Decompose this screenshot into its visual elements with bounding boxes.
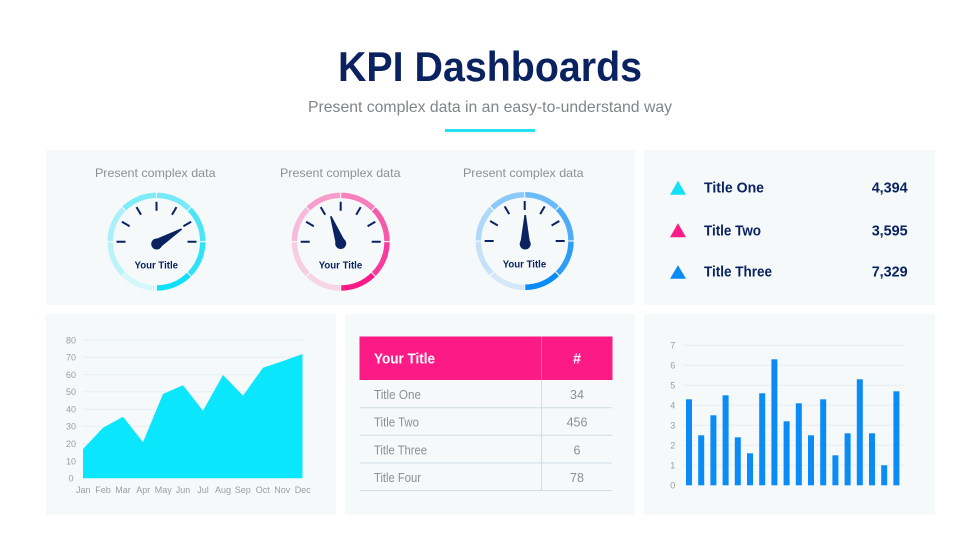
legend row: Title Three [670, 264, 908, 281]
gauge: blue: Present complex data [463, 166, 584, 180]
table rows: 78 [570, 471, 584, 485]
bar chart gridlines and y axis: 1 [670, 460, 675, 470]
bar chart gridlines and y axis: 7 [670, 340, 675, 350]
gauge: pink: Present complex data [280, 166, 401, 180]
bar chart gridlines and y axis: 4 [670, 400, 675, 410]
table rows: Title Two [374, 416, 419, 430]
area chart gridlines and y axis: 0 [68, 474, 74, 484]
table rules [360, 380, 612, 490]
panel: area chart [46, 314, 336, 515]
area chart gridlines and y axis: 80 [66, 335, 76, 345]
gauge: blue: Your Title [503, 258, 546, 270]
bar chart gridlines and y axis [670, 340, 904, 490]
bars [686, 359, 899, 485]
title: KPI Dashboards [338, 43, 642, 90]
month labels: Apr [136, 485, 150, 495]
month labels: Jul [197, 485, 209, 495]
table rows: Title Four [374, 471, 421, 485]
area chart gridlines and y axis: 30 [66, 422, 76, 432]
area chart gridlines and y axis: 60 [66, 370, 76, 380]
area chart gridlines and y axis: 10 [66, 456, 76, 466]
table rows: Title Three [374, 444, 427, 458]
month labels [76, 485, 311, 495]
panel: bar chart [644, 314, 935, 515]
legend row: Title Two: Title Two [704, 222, 761, 239]
table header [360, 336, 612, 380]
area series [83, 354, 302, 478]
panel: legend with KPI values [644, 150, 935, 305]
gauge: cyan [91, 166, 222, 307]
month labels: Mar [115, 485, 131, 495]
area chart gridlines and y axis: 40 [66, 404, 76, 414]
area chart gridlines and y axis: 70 [66, 353, 76, 363]
legend row: Title Two: 3,595 [872, 222, 908, 239]
panel: table [345, 314, 635, 515]
month labels: Jun [176, 485, 190, 495]
legend row: Title Three: Title Three [704, 264, 772, 281]
area chart gridlines and y axis: 20 [66, 439, 76, 449]
month labels: Oct [256, 485, 270, 495]
table rows: 456 [567, 416, 587, 430]
table rows: 6 [574, 444, 581, 458]
title underline accent [445, 129, 535, 132]
area chart gridlines and y axis [66, 335, 303, 484]
month labels: Jan [76, 485, 91, 495]
gauge: cyan: Present complex data [95, 166, 216, 180]
month labels: Sep [235, 485, 251, 495]
table header: # [573, 352, 581, 368]
subtitle: Present complex data in an easy-to-understand way [308, 99, 672, 116]
gauge: cyan: Your Title [134, 260, 178, 272]
month labels: May [155, 485, 172, 495]
month labels: Nov [274, 485, 291, 495]
month labels: Aug [215, 485, 231, 495]
gauge: pink: Your Title [319, 260, 362, 272]
legend row: Title One: 4,394 [872, 179, 908, 196]
table header: Your Title [374, 352, 435, 368]
bar chart gridlines and y axis: 0 [670, 480, 675, 490]
area chart gridlines and y axis: 50 [66, 387, 76, 397]
bar chart gridlines and y axis: 3 [670, 420, 675, 430]
panel: gauges [46, 150, 635, 307]
legend row: Title One [670, 179, 908, 196]
legend row: Title Three: 7,329 [872, 264, 908, 281]
bar chart gridlines and y axis: 6 [670, 360, 675, 370]
month labels: Feb [95, 485, 111, 495]
table rows: 34 [570, 388, 584, 402]
bar chart gridlines and y axis: 2 [670, 440, 675, 450]
table rows: Title One [374, 388, 421, 402]
legend row: Title Two [670, 222, 908, 239]
gauge: blue [459, 166, 590, 306]
legend row: Title One: Title One [704, 179, 764, 196]
month labels: Dec [295, 485, 311, 495]
bar chart gridlines and y axis: 5 [670, 380, 675, 390]
table rows [374, 388, 587, 485]
gauge: pink [275, 166, 406, 307]
